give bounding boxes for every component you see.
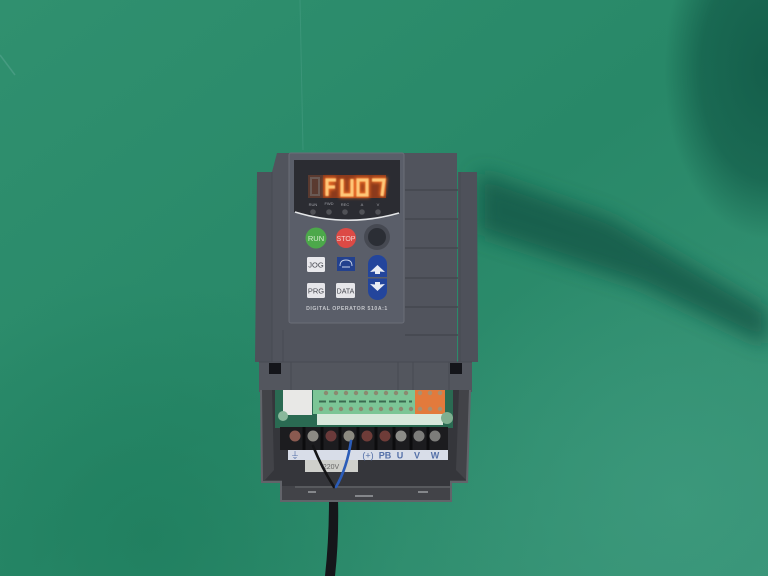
screws xyxy=(290,430,440,442)
relay screws xyxy=(418,391,442,411)
power terminal block xyxy=(280,427,448,450)
terminal bay: V xyxy=(414,450,420,460)
board marks xyxy=(441,412,453,424)
control panel xyxy=(289,153,404,323)
terminal bay: PB xyxy=(379,450,392,460)
STOP button xyxy=(336,228,356,248)
STOP button: STOP xyxy=(337,236,356,243)
LED labels: V xyxy=(377,202,380,207)
inverter housing xyxy=(255,153,478,392)
status LEDs xyxy=(310,209,381,215)
LED labels: RUN xyxy=(309,202,317,207)
terminal bay: (+) xyxy=(362,450,374,460)
reverse key xyxy=(337,257,355,271)
LED labels xyxy=(309,201,380,207)
body seams xyxy=(259,172,472,390)
green control terminals xyxy=(313,390,415,414)
cable outside xyxy=(325,500,338,576)
LED labels: A xyxy=(361,202,364,207)
screw rows xyxy=(319,391,413,411)
LED labels: REC xyxy=(341,202,349,207)
floor details xyxy=(308,492,428,496)
PRG key xyxy=(307,283,325,298)
enclosure rim xyxy=(260,390,471,502)
PRG key: PRG xyxy=(308,286,324,296)
rating sticker xyxy=(305,460,358,472)
vent ribs xyxy=(405,190,458,335)
latch notches xyxy=(269,363,281,374)
DATA key: DATA xyxy=(337,288,355,296)
side fins xyxy=(255,172,273,362)
main body xyxy=(272,153,457,362)
green circuit board xyxy=(275,390,453,428)
up down keys xyxy=(368,255,387,300)
orange relay terminals xyxy=(415,390,445,414)
rotary knob xyxy=(364,224,390,250)
DATA key xyxy=(336,283,355,298)
terminal labels strip xyxy=(317,414,443,425)
terminal bay: 220V xyxy=(323,464,339,471)
LED display xyxy=(308,175,386,198)
terminal slots xyxy=(319,400,412,402)
display window xyxy=(294,160,400,219)
terminal separators xyxy=(304,427,428,452)
JOG key xyxy=(307,257,325,272)
bay interior xyxy=(265,390,466,486)
terminal bay: W xyxy=(431,450,440,460)
JOG key: JOG xyxy=(308,260,324,270)
cables xyxy=(313,441,351,487)
RUN button xyxy=(306,228,326,248)
terminal bay xyxy=(260,390,471,502)
LED labels: FWD xyxy=(324,201,334,206)
RUN button: RUN xyxy=(308,234,324,243)
white connector block xyxy=(283,390,312,415)
model label: DIGITAL OPERATOR 510A:1 xyxy=(306,306,388,312)
terminal bay: ⏚ xyxy=(290,450,300,460)
terminal bay: U xyxy=(397,450,403,460)
white curved stripe xyxy=(295,212,399,220)
power label strip xyxy=(288,450,448,460)
